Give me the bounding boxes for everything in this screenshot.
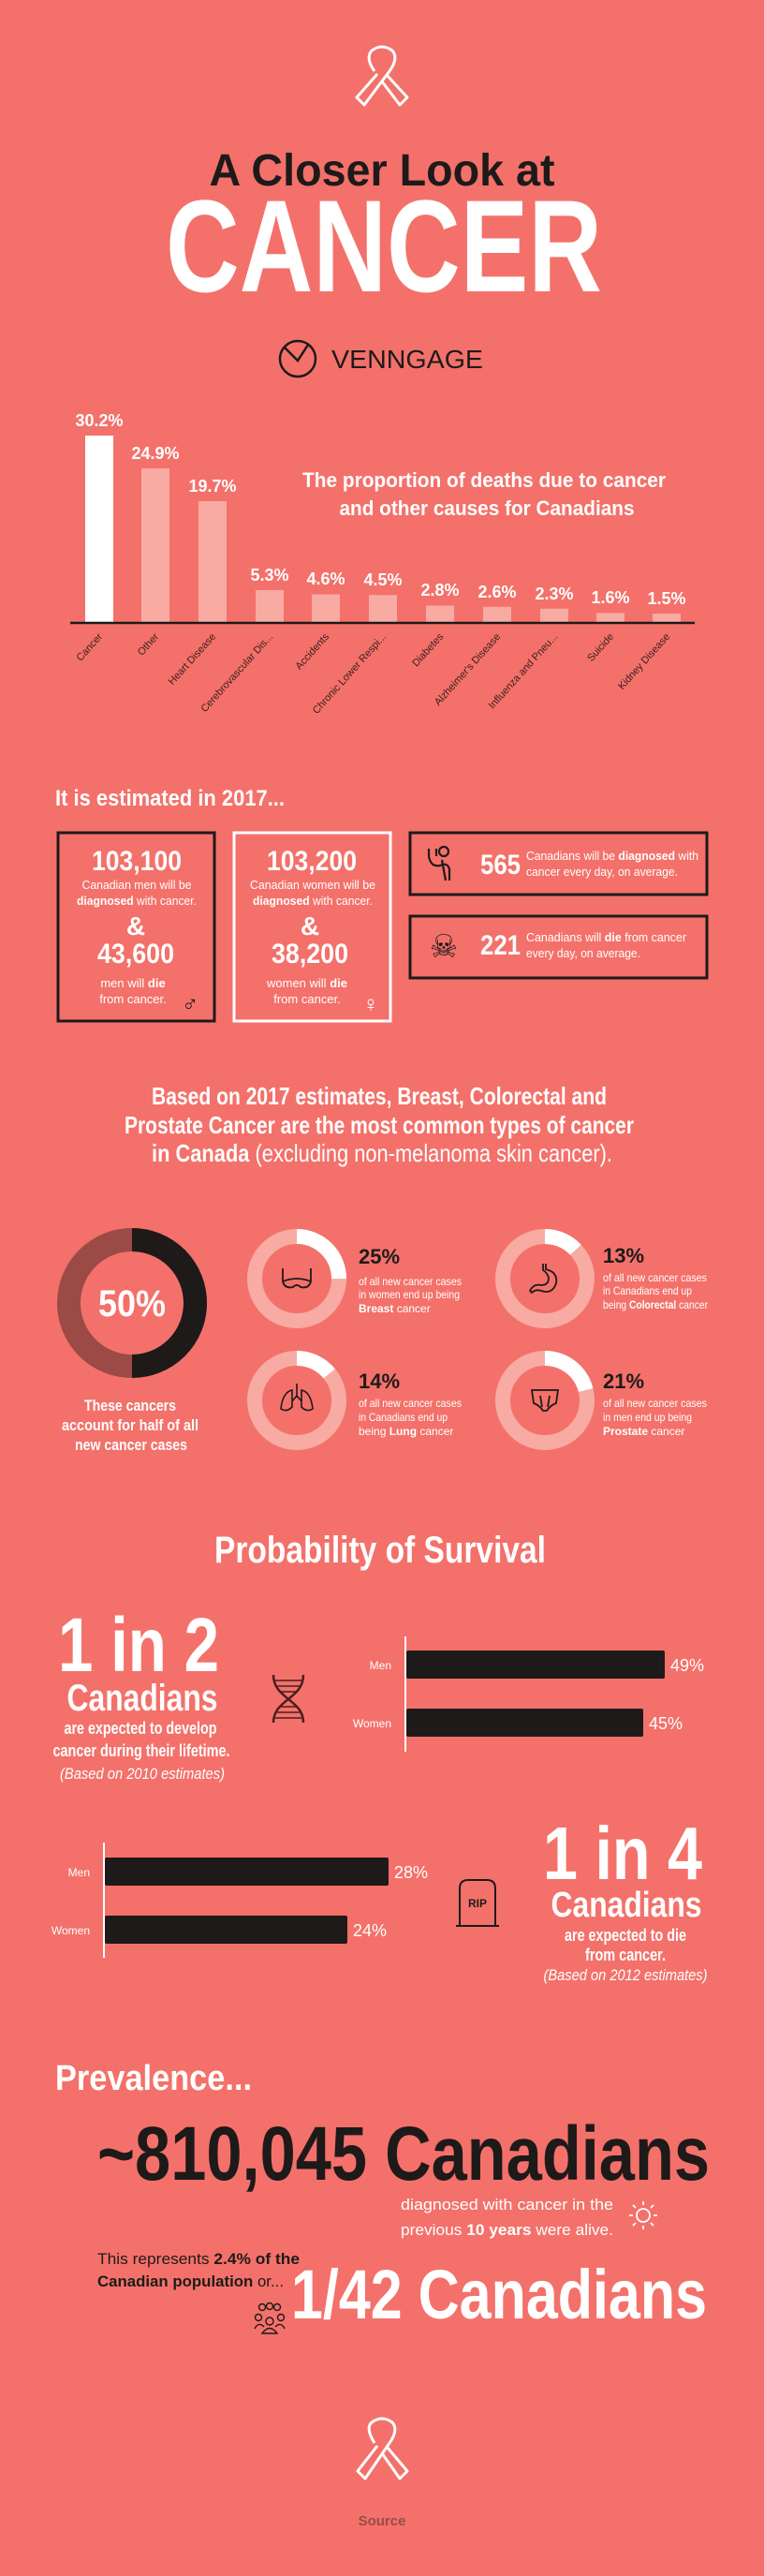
stat: 1 in 2: (Based on 2010 estimates): [60, 1765, 225, 1783]
donut: prostate 21%: [503, 1358, 707, 1443]
bar chart: die from cancer: Men: [68, 1866, 90, 1879]
bar chart: causes of death: Kidney Disease: [616, 631, 672, 692]
stat: 1 in 4: from cancer.: [585, 1946, 666, 1964]
donut: lung 14%: of all new cancer cases: [359, 1397, 462, 1410]
donut: 50%: These cancers: [84, 1397, 176, 1414]
bar chart: develop cancer: 45%: [649, 1714, 683, 1733]
logo: venngage: VENNGAGE: [331, 345, 483, 374]
panel: women: 103,200: [267, 846, 357, 877]
chart title: [302, 468, 666, 520]
bar chart: causes of death: Heart Disease: [167, 631, 218, 688]
icon: people: [255, 2302, 285, 2333]
icon: stomach: [530, 1264, 556, 1293]
bar chart: develop cancer: Men: [370, 1659, 391, 1672]
text: population share: [97, 2250, 300, 2290]
donut: prostate 21%: 21%: [603, 1369, 644, 1393]
icon: sun: [629, 2201, 657, 2229]
icon: skull: ☠: [430, 929, 458, 965]
stat: 1 in 4: Canadians: [551, 1886, 702, 1925]
icon: lungs: [281, 1384, 313, 1411]
chart title: and other causes for Canadians: [339, 496, 635, 520]
donut: 50%: new cancer cases: [75, 1436, 187, 1454]
text: diagnosed previous 10 years: previous 10 years were alive.: [401, 2221, 613, 2239]
bar chart: die from cancer: [51, 1843, 428, 1958]
text: population share: This represents 2.4% of the: [97, 2250, 300, 2268]
donut: lung 14%: 14%: [359, 1369, 400, 1393]
text: population share: Canadian population or...: [97, 2273, 284, 2290]
panel: diagnosed daily: [410, 833, 707, 895]
donut: lung 14%: being Lung cancer: [359, 1425, 453, 1438]
panel: women: women will die: [266, 976, 347, 990]
panel: men: men will die: [100, 976, 166, 990]
bar chart: causes of death: Suicide: [585, 631, 616, 664]
donut: 50%: account for half of all: [62, 1416, 198, 1434]
bar chart: causes of death: 5.3%: [250, 566, 289, 585]
bar chart: causes of death: Alzheimer's Disease: [433, 631, 503, 708]
heading: prevalence: Prevalence...: [55, 2059, 252, 2098]
donut: lung 14%: [255, 1358, 462, 1443]
icon: ribbon top: [357, 47, 407, 105]
icon: male: ♂: [182, 992, 198, 1017]
bar chart: causes of death: 4.6%: [306, 570, 345, 588]
donut: breast 25%: Breast cancer: [359, 1302, 431, 1315]
panel: women: from cancer.: [273, 992, 341, 1006]
donut: prostate 21%: of all new cancer cases: [603, 1397, 707, 1410]
panel: deaths daily: [410, 916, 707, 978]
bar chart: develop cancer: Women: [353, 1717, 391, 1730]
donut: prostate 21%: Prostate cancer: [603, 1425, 684, 1438]
panel: women: Canadian women will be: [250, 878, 375, 892]
title: [166, 146, 602, 319]
bar chart: causes of death: 19.7%: [188, 477, 237, 496]
heading: most common cancers: Prostate Cancer are the most common types of cancer: [125, 1111, 634, 1139]
icon: dna: [273, 1675, 303, 1723]
source: Source: [359, 2513, 405, 2529]
bar chart: causes of death: 1.6%: [591, 588, 630, 607]
donut: colorectal 13%: 13%: [603, 1244, 644, 1267]
chart title: The proportion of deaths due to cancer: [302, 468, 666, 492]
icon: stethoscope: [429, 847, 449, 881]
heading: most common cancers: Based on 2017 estimates, Breast, Colorectal and: [152, 1082, 607, 1110]
panel: men: diagnosed with cancer.: [77, 894, 197, 908]
donut: breast 25%: in women end up being: [359, 1288, 460, 1301]
bar chart: causes of death: 2.6%: [478, 583, 517, 601]
heading: probability of survival: Probability of Survival: [214, 1530, 546, 1571]
panel: diagnosed daily: cancer every day, on average.: [526, 866, 678, 879]
bar chart: causes of death: 2.3%: [535, 585, 574, 603]
panel: deaths daily: Canadians will die from cancer: [526, 931, 686, 944]
stat: 1 in 4: 1 in 4: [543, 1812, 702, 1895]
panel: women: [234, 833, 390, 1021]
donut: colorectal 13%: being Colorectal cancer: [603, 1298, 708, 1311]
icon: tombstone: RIP: [468, 1897, 487, 1910]
heading: estimated 2017: It is estimated in 2017...: [55, 786, 285, 811]
title: A Closer Look at: [210, 146, 555, 196]
stat: 1 in 4: (Based on 2012 estimates): [543, 1966, 708, 1984]
donut: 50%: [62, 1240, 198, 1454]
text: diagnosed previous 10 years: diagnosed with cancer in the: [401, 2196, 613, 2213]
bar chart: causes of death: 2.8%: [420, 581, 460, 600]
bar chart: causes of death: 4.5%: [363, 570, 403, 589]
donut: 50%: 50%: [98, 1283, 166, 1325]
panel: women: diagnosed with cancer.: [253, 894, 373, 908]
bar chart: develop cancer: 49%: [670, 1656, 704, 1675]
bar chart: causes of death: [70, 411, 695, 717]
donut: colorectal 13%: in Canadians end up: [603, 1284, 692, 1297]
panel: men: from cancer.: [99, 992, 167, 1006]
bar chart: causes of death: Accidents: [293, 631, 332, 672]
panel: women: &: [301, 911, 319, 940]
bar chart: causes of death: Cancer: [75, 631, 105, 663]
donut: breast 25%: of all new cancer cases: [359, 1275, 462, 1288]
stat: 1 in 2: cancer during their lifetime.: [52, 1741, 230, 1760]
bar chart: die from cancer: 28%: [394, 1863, 428, 1882]
donut: prostate 21%: in men end up being: [603, 1411, 692, 1424]
stat: 1 in 2: are expected to develop: [64, 1719, 217, 1738]
bar chart: causes of death: Diabetes: [410, 631, 447, 669]
panel: men: [58, 833, 214, 1021]
panel: deaths daily: every day, on average.: [526, 947, 640, 960]
bar chart: causes of death: Chronic Lower Respi...: [311, 631, 389, 717]
stat: 1 in 2: 1 in 2: [58, 1603, 219, 1688]
bar chart: die from cancer: 24%: [353, 1921, 387, 1940]
donut: breast 25%: 25%: [359, 1245, 400, 1268]
icon: underwear: [532, 1390, 558, 1411]
bar chart: causes of death: 24.9%: [131, 444, 180, 463]
donut: lung 14%: in Canadians end up: [359, 1411, 448, 1424]
panel: men: Canadian men will be: [82, 878, 191, 892]
icon: ribbon bottom: [358, 2419, 407, 2479]
bar chart: die from cancer: Women: [51, 1924, 90, 1937]
bar chart: develop cancer: [353, 1636, 704, 1752]
bar chart: causes of death: Other: [136, 631, 161, 658]
panel: men: 103,100: [92, 846, 182, 877]
panel: women: 38,200: [272, 939, 348, 970]
stat: 1 in 2: Canadians: [67, 1678, 217, 1719]
heading: most common cancers: [125, 1082, 634, 1167]
donut: colorectal 13%: of all new cancer cases: [603, 1271, 707, 1284]
panel: men: &: [126, 911, 145, 940]
panel: diagnosed daily: 565: [480, 850, 521, 881]
bar chart: causes of death: Influenza and Pneu...: [487, 631, 560, 711]
stat: 1 in 4: [543, 1812, 708, 1984]
donut: breast 25%: [255, 1236, 462, 1321]
stat: 1 in 4: are expected to die: [565, 1926, 686, 1945]
icon: tombstone: [456, 1880, 499, 1926]
icon: female: ♀: [362, 992, 379, 1017]
bar chart: causes of death: 30.2%: [75, 411, 124, 430]
panel: men: 43,600: [97, 939, 174, 970]
icon: bra: [283, 1268, 311, 1287]
title: CANCER: [166, 172, 602, 319]
bar chart: causes of death: 1.5%: [647, 589, 686, 608]
panel: deaths daily: 221: [480, 930, 521, 961]
stat: 1 in 2: [52, 1603, 230, 1783]
donut: colorectal 13%: [503, 1236, 708, 1321]
text: diagnosed previous 10 years: [401, 2196, 613, 2239]
panel: diagnosed daily: Canadians will be diagnosed with: [526, 850, 698, 863]
heading: most common cancers: in Canada (excluding non-melanoma skin cancer).: [152, 1139, 612, 1167]
bar chart: causes of death: Cerebrovascular Dis...: [198, 631, 275, 715]
logo: venngage: [280, 341, 483, 377]
